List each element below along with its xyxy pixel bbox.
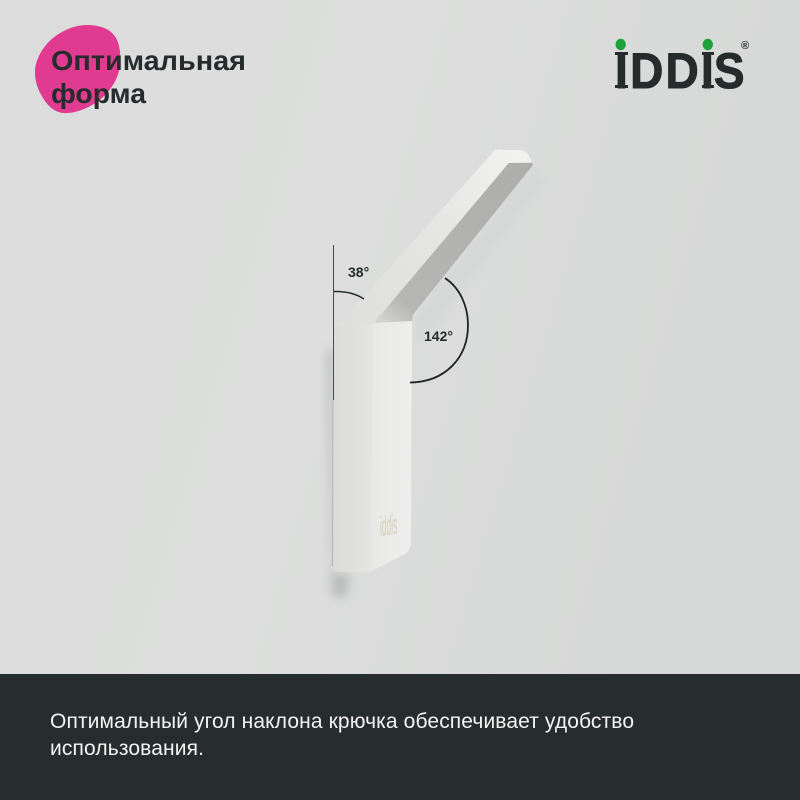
engraved logo: iddis xyxy=(380,509,397,543)
title text xyxy=(51,45,246,109)
plate side face xyxy=(332,324,374,572)
footer band xyxy=(0,674,800,800)
brand logo: IDDIS xyxy=(615,44,745,99)
footer text: Оптимальный угол наклона крючка обеспечивает удобство xyxy=(50,710,634,733)
pink blob xyxy=(35,25,120,113)
angle annotation 142: 142° xyxy=(424,328,453,344)
footer text xyxy=(50,710,634,760)
angle annotation 142 xyxy=(410,278,468,382)
arm top face xyxy=(333,150,532,328)
hook product xyxy=(327,150,545,598)
angle annotation 38: 38° xyxy=(348,264,369,280)
title text: Оптимальная xyxy=(51,45,246,76)
footer text: использования. xyxy=(50,737,204,760)
hook shadow xyxy=(327,350,350,598)
angle annotation 38 xyxy=(334,245,369,400)
arm underside xyxy=(375,163,533,324)
plate left edge xyxy=(332,400,334,566)
brand logo: ® xyxy=(741,40,749,52)
title text: форма xyxy=(51,78,146,109)
plate front face xyxy=(370,321,412,572)
title badge xyxy=(35,25,246,113)
